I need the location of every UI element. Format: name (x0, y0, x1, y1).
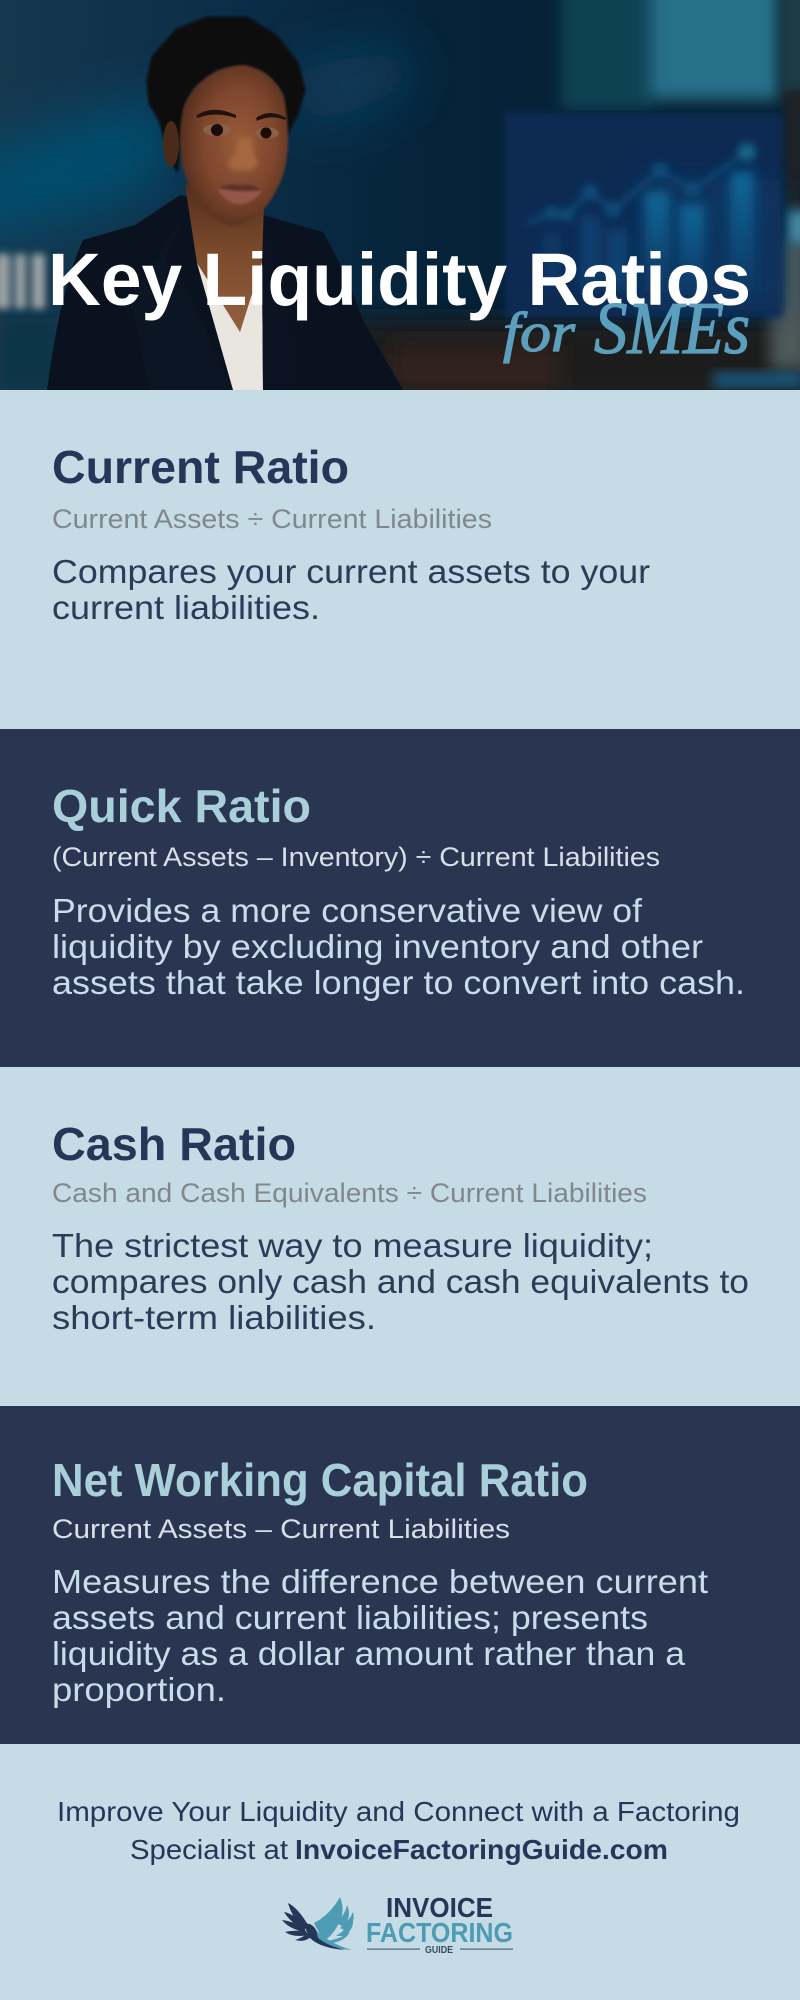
call to action (57, 1796, 740, 1865)
eyes (203, 124, 231, 136)
icon: wing teal (314, 1897, 354, 1950)
description: liquidity by excluding inventory and other (52, 928, 703, 965)
formula: (Current Assets – Inventory) ÷ Current Liabilities (52, 842, 660, 872)
panel: current ratio (0, 390, 800, 729)
description (52, 1227, 749, 1336)
heading: Current Ratio (52, 441, 349, 493)
call to action: Specialist at (130, 1834, 288, 1865)
heading: Net Working Capital Ratio (52, 1454, 588, 1506)
panel: net working capital ratio (0, 1406, 800, 1744)
call to action: Improve Your Liquidity and Connect with a Factoring (57, 1796, 740, 1827)
description: Provides a more conservative view of (52, 892, 643, 929)
description: Measures the difference between current (52, 1563, 708, 1600)
description: compares only cash and cash equivalents to (52, 1263, 749, 1300)
heading: Quick Ratio (52, 780, 311, 832)
formula: Current Assets – Current Liabilities (52, 1514, 510, 1544)
title: Key Liquidity Ratios (48, 238, 751, 321)
subtitle script: for (503, 302, 575, 364)
blurred monitor with chart (505, 113, 783, 317)
panel: footer (0, 1744, 800, 2000)
description: Compares your current assets to your (52, 553, 650, 590)
subtitle script: SMEs (594, 288, 750, 370)
logo wordmark: guide: GUIDE (425, 1945, 453, 1956)
blazer (47, 195, 403, 390)
brows (196, 110, 236, 118)
neck and chest (185, 184, 264, 332)
ear (163, 121, 179, 167)
lapels (232, 389, 233, 390)
logo wordmark: invoice: INVOICE (386, 1892, 493, 1923)
hero banner (0, 0, 800, 400)
description (52, 553, 650, 626)
hair (148, 18, 304, 170)
description: assets and current liabilities; presents (52, 1599, 648, 1636)
subtitle script (503, 288, 750, 370)
description: assets that take longer to convert into cash. (52, 964, 745, 1001)
white shirt (197, 262, 263, 390)
description: liquidity as a dollar amount rather than a (52, 1635, 686, 1672)
lips (217, 187, 262, 204)
icon: wing dark (282, 1903, 345, 1950)
panel: quick ratio (0, 729, 800, 1067)
heading: Cash Ratio (52, 1118, 296, 1170)
panel: cash ratio (0, 1067, 800, 1406)
formula: Cash and Cash Equivalents ÷ Current Liabilities (52, 1178, 647, 1208)
hero background office (0, 0, 800, 400)
logo wordmark: factoring: FACTORING (366, 1917, 513, 1948)
call to action: InvoiceFactoringGuide.com (295, 1834, 668, 1865)
description: short-term liabilities. (52, 1299, 376, 1336)
face (180, 65, 288, 226)
nose (227, 138, 258, 170)
woman portrait (47, 18, 403, 390)
description (52, 1563, 708, 1708)
logo (282, 1892, 513, 1956)
description: proportion. (52, 1671, 226, 1708)
formula: Current Assets ÷ Current Liabilities (52, 504, 492, 534)
description: current liabilities. (52, 589, 320, 626)
description (52, 892, 745, 1001)
description: The strictest way to measure liquidity; (52, 1227, 653, 1264)
